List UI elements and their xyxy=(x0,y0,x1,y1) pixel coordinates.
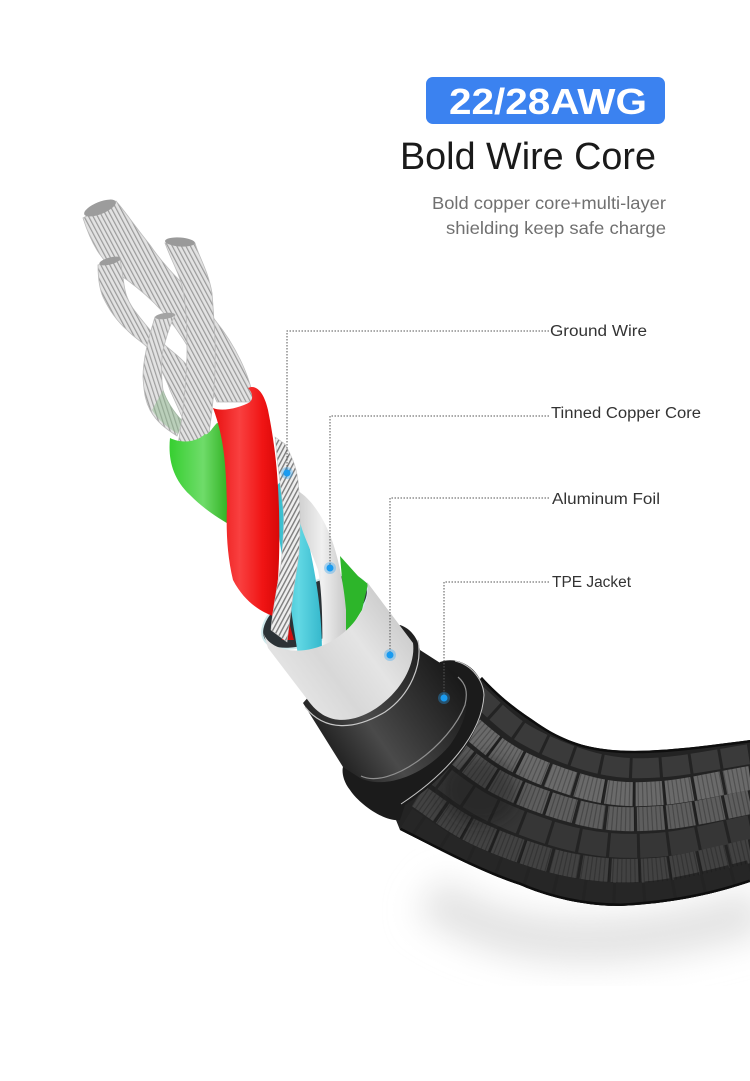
connector flange xyxy=(343,660,484,820)
aluminum foil shield xyxy=(263,582,413,720)
foil opening interior xyxy=(251,560,379,664)
cable illustration xyxy=(82,196,750,915)
bare copper strand: rear short xyxy=(98,255,196,428)
heading: Bold Wire Core xyxy=(400,136,656,178)
callout: TPE Jacket xyxy=(438,574,632,704)
callout: Tinned Copper Core xyxy=(324,405,701,574)
callout: Ground Wire xyxy=(281,323,647,479)
badge: 22/28AWG: 22/28AWG xyxy=(449,81,647,122)
bare copper strand: small xyxy=(143,312,183,436)
callout: Aluminum Foil: Aluminum Foil xyxy=(552,491,660,508)
green insulated wire xyxy=(170,423,244,526)
cable shadow xyxy=(430,895,750,940)
description text xyxy=(432,193,666,238)
callout: Ground Wire: Ground Wire xyxy=(550,323,647,340)
description text: Bold copper core+multi-layer xyxy=(432,193,666,213)
cyan insulated wire xyxy=(275,482,322,656)
bare copper strand: front xyxy=(165,236,215,445)
green back wire xyxy=(338,556,368,634)
description text: shielding keep safe charge xyxy=(446,218,666,238)
red insulated wire xyxy=(213,387,294,640)
white insulated wire xyxy=(298,491,346,656)
callout: TPE Jacket: TPE Jacket xyxy=(552,574,632,591)
bare ground wire strand xyxy=(271,437,300,642)
bare copper strand: rear long xyxy=(82,196,254,402)
black jacket xyxy=(303,625,467,782)
callout: Aluminum Foil xyxy=(384,491,660,661)
braided nylon sleeve xyxy=(396,677,750,906)
badge: 22/28AWG xyxy=(426,77,665,124)
callout: Tinned Copper Core: Tinned Copper Core xyxy=(551,405,701,422)
